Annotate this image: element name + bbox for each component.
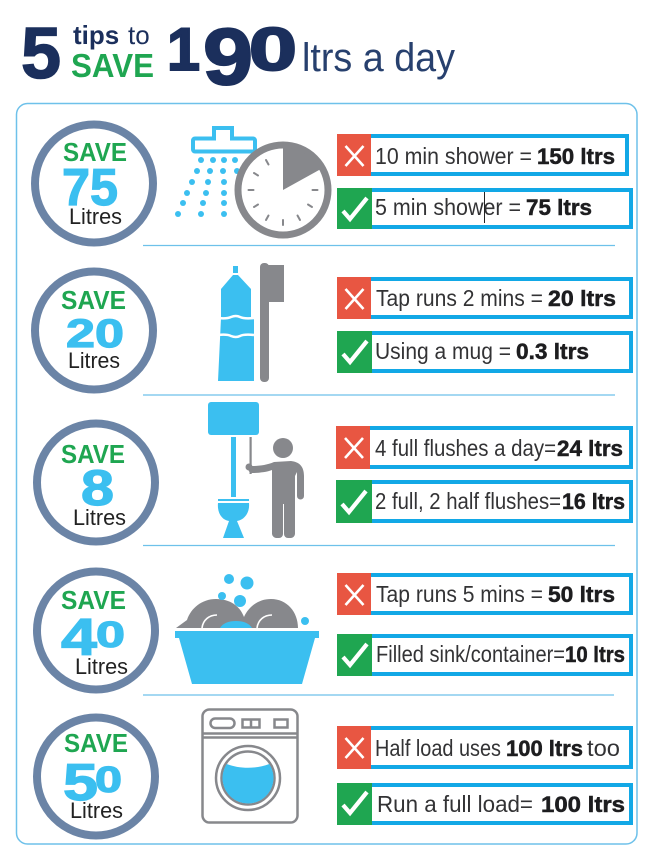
badge: save 8 litres: SAVE [61,441,125,469]
bad habit: half load: too [587,735,620,761]
panel: tip 2 toothbrushing [35,263,631,390]
icon: toothbrush [260,263,284,382]
icon: clock [238,145,328,235]
bad habit: half load [337,726,631,769]
good habit: 2 full 2 half flushes: 2 full, 2 half flushes= [375,488,561,514]
title: 190: 0 [249,16,297,83]
bad habit: 10 min shower: 10 min shower = [375,143,532,169]
good habit: 5 min shower: 75 ltrs [526,195,592,220]
icon: toothpaste [218,266,254,381]
bad habit: tap runs 5 mins [337,573,631,615]
bad habit: tap runs 5 mins: Tap runs 5 mins = [376,581,543,607]
bad habit: 4 full flushes: 24 ltrs [557,436,623,461]
good habit: using a mug: Using a mug = [375,338,511,364]
bad habit: half load: 100 ltrs [506,736,583,761]
panel: tip 1 shower [35,124,631,242]
bad habit: tap runs 2 mins [337,277,631,319]
good habit: 2 full 2 half flushes [336,480,631,523]
title: ltrs a day: ltrs a day [302,36,455,80]
badge: save 40 litres: 0 [96,614,125,655]
icon: washing machine [202,710,298,822]
badge: save 8 litres: 8 [81,460,114,516]
title: 190: 1 [167,16,200,83]
icon: toilet [208,402,259,538]
panel: tip 3 toilet [37,402,631,542]
badge: save 40 litres: 4 [61,609,97,667]
good habit: using a mug [337,331,631,373]
badge: save 20 litres: Litres [68,348,120,373]
badge: save 75 litres [35,124,153,242]
bad habit: 10 min shower: 150 ltrs [537,144,615,169]
bad habit: tap runs 2 mins: Tap runs 2 mins = [376,285,543,311]
title: 5: 5 [21,14,61,94]
good habit: run a full load [337,783,631,825]
badge: save 75 litres: Litres [69,204,122,229]
panel: tip 5 washing machine [37,710,631,836]
good habit: using a mug: 0.3 ltrs [516,339,589,364]
good habit: 2 full 2 half flushes: 16 ltrs [562,489,625,514]
badge: save 75 litres: 75 [62,159,118,217]
bad habit: tap runs 5 mins: 50 ltrs [548,582,615,607]
bad habit: 4 full flushes: 4 full flushes a day= [375,435,556,461]
badge: save 50 litres: Litres [70,798,123,823]
title: tips to: tips [73,20,119,50]
bad habit: half load: Half load uses [375,735,501,761]
good habit: filled sink [337,634,631,676]
badge: save 20 litres: 20 [66,312,124,356]
badge: save 50 litres: 5 [63,754,98,812]
icon: person pulling chain [246,437,304,538]
good habit: 5 min shower: 5 min shower = [375,194,521,220]
bad habit: 10 min shower [337,134,627,176]
good habit: filled sink: 10 ltrs [565,642,625,667]
badge: save 50 litres: 0 [95,759,122,800]
badge: save 75 litres: SAVE [63,139,127,167]
badge: save 40 litres: SAVE [61,587,126,615]
title [21,12,455,101]
good habit: run a full load: 100 ltrs [541,792,625,817]
good habit: run a full load: Run a full load= [377,791,533,817]
title: tips to: to [128,20,150,50]
badge: save 40 litres: Litres [75,654,128,679]
icon: dishes in basin [175,574,319,684]
good habit: filled sink: Filled sink/container= [376,641,565,667]
title: SAVE: SAVE [71,47,154,84]
panel: tip 4 dishes [37,572,631,690]
badge: save 20 litres: SAVE [61,287,126,315]
title: 190: 9 [203,12,253,101]
icon: shower [175,128,255,217]
good habit: 5 min shower [337,188,631,229]
bad habit: tap runs 2 mins: 20 ltrs [548,286,616,311]
badge: save 50 litres [37,718,155,836]
badge: save 40 litres [37,572,155,690]
badge: save 20 litres [35,272,153,390]
badge: save 8 litres: Litres [73,505,126,530]
badge: save 8 litres [37,424,155,542]
badge: save 50 litres: SAVE [64,730,128,758]
bad habit: 4 full flushes [336,426,631,469]
